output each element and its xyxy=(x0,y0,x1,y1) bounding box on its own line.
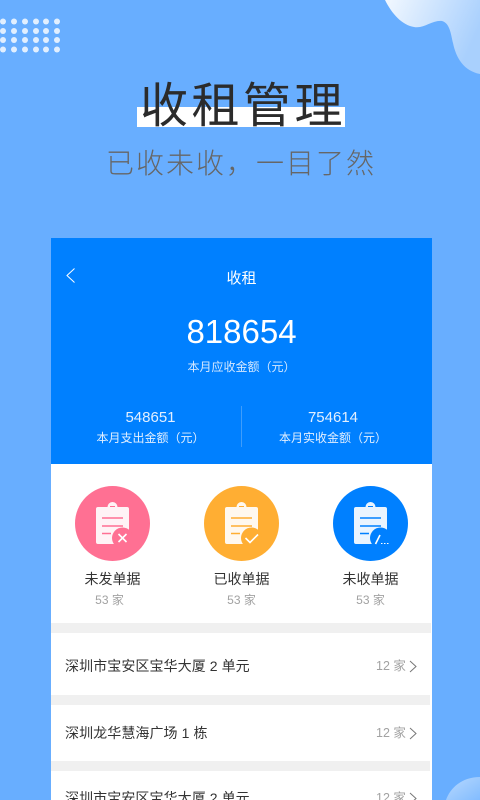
row count: 12 家 xyxy=(376,726,406,740)
header title: 收租 xyxy=(226,270,256,287)
title highlight xyxy=(137,107,345,127)
row name: 深圳龙华慧海广场 1 栋 xyxy=(65,725,208,741)
icon: clipboard with pen xyxy=(333,486,408,561)
stat: monthly received xyxy=(279,409,387,445)
stat: monthly received: 本月实收金额（元） xyxy=(279,431,387,445)
stat: monthly received: 754614 xyxy=(308,409,358,426)
count: 53 家 xyxy=(356,593,385,607)
count: 53 家 xyxy=(95,593,124,607)
category: unreceived xyxy=(333,486,408,607)
title: 收租管理 xyxy=(140,80,346,133)
list row 2 xyxy=(65,725,417,741)
stat divider xyxy=(241,406,242,447)
icon: back arrow xyxy=(66,268,75,283)
panel: blue header xyxy=(51,238,432,464)
icon: clipboard with cross xyxy=(75,486,150,561)
panel: phone screen xyxy=(51,238,432,800)
row name: 深圳市宝安区宝华大厦 2 单元 xyxy=(65,658,250,674)
stat: monthly expense: 548651 xyxy=(125,409,176,426)
icon: chevron xyxy=(410,660,417,672)
label: 未收单据 xyxy=(342,571,398,587)
category: unissued xyxy=(75,486,150,607)
row count: 12 家 xyxy=(376,659,406,673)
count: 53 家 xyxy=(227,593,256,607)
list row 1 xyxy=(65,658,417,674)
dot grid decoration xyxy=(0,18,60,52)
list separator bands xyxy=(51,623,431,633)
label: 已收单据 xyxy=(214,571,270,587)
category: received xyxy=(204,486,279,607)
subtitle: 已收未收，一目了然 xyxy=(106,148,376,179)
main amount: 818654 xyxy=(186,313,297,350)
main amount label: 本月应收金额（元） xyxy=(187,360,296,374)
stat: monthly expense xyxy=(96,409,204,445)
icon: chevron xyxy=(410,728,417,740)
icon: clipboard with check xyxy=(204,486,279,561)
list row 3 xyxy=(65,790,417,800)
icon: chevron xyxy=(410,792,417,800)
label: 未发单据 xyxy=(84,571,140,587)
stat: monthly expense: 本月支出金额（元） xyxy=(96,431,204,445)
